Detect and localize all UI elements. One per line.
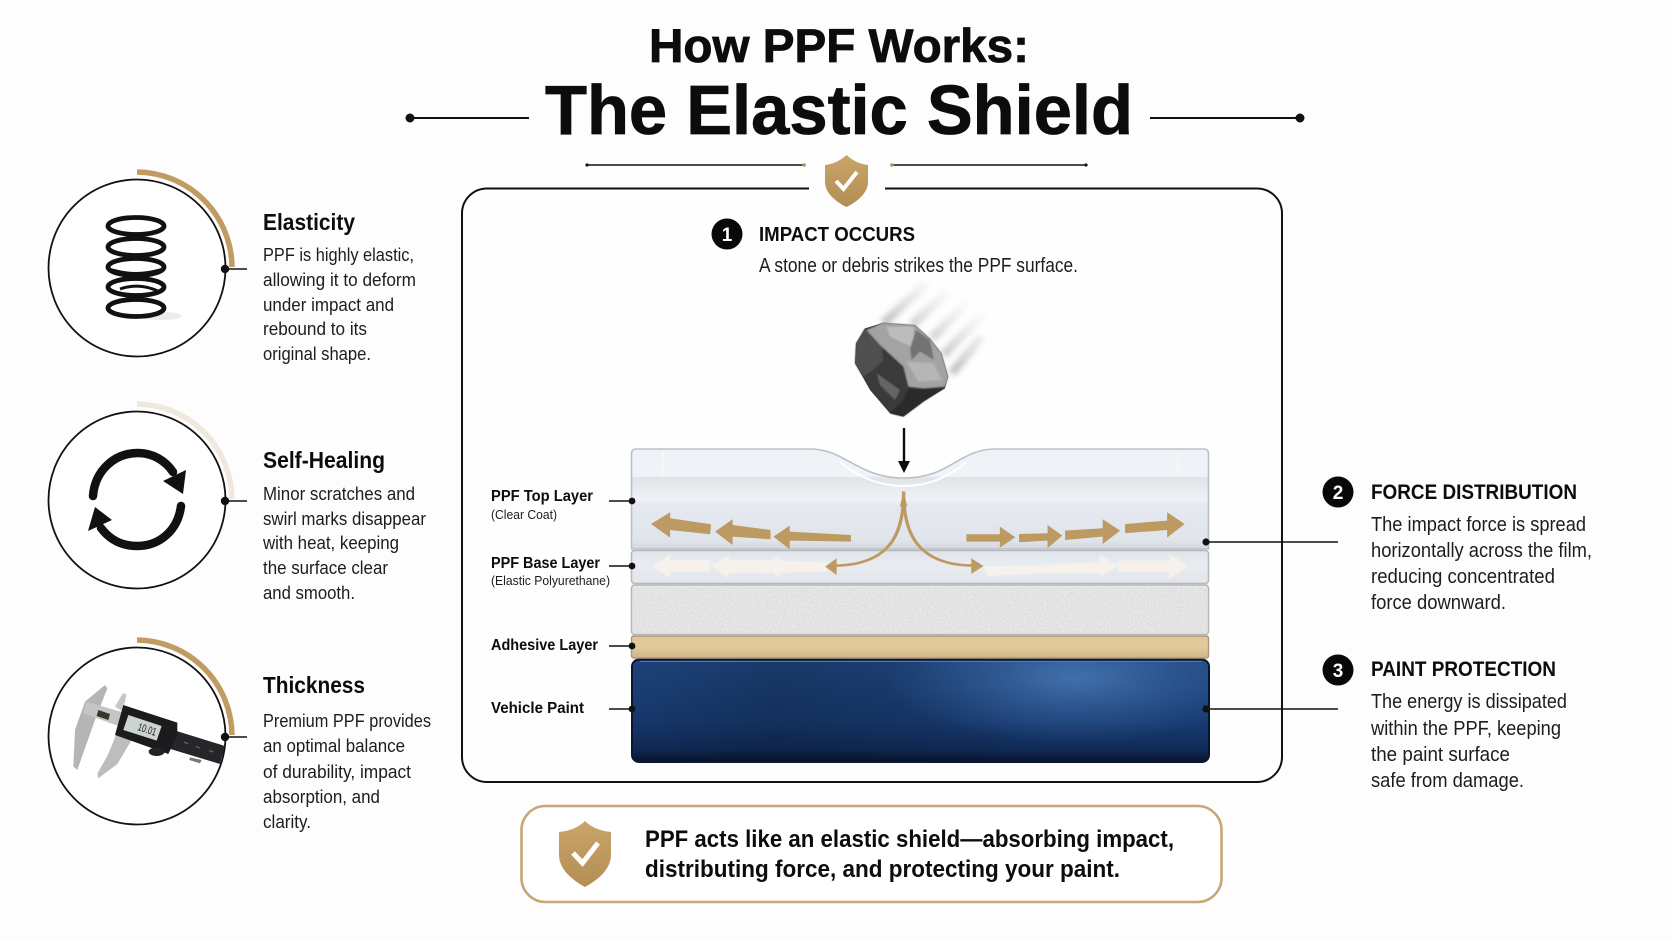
icon: callout shield (559, 821, 611, 887)
gold arrows left (651, 512, 851, 549)
right leader lines (1202, 538, 1338, 713)
divider rules beside shield (585, 163, 1088, 167)
self-healing text: swirl marks disappear (263, 509, 426, 529)
layer stack (632, 449, 1209, 762)
thickness text: an optimal balance (263, 736, 405, 756)
gold arrows right (966, 512, 1185, 548)
elasticity text: PPF is highly elastic, (263, 245, 414, 265)
label: PPF base layer (491, 555, 610, 588)
step 3 text: the paint surface (1371, 744, 1510, 766)
title line 2: The Elastic Shield (545, 71, 1133, 149)
label: PPF top layer: (Clear Coat) (491, 508, 557, 522)
circle badge with cycle arrows (48, 404, 247, 588)
callout box (522, 806, 1222, 902)
self-healing text: with heat, keeping (262, 533, 399, 553)
label: vehicle paint: Vehicle Paint (491, 700, 585, 717)
icon: gold shield (825, 155, 868, 207)
title line 1: How PPF Works: (649, 19, 1029, 72)
elasticity text: allowing it to deform (263, 270, 416, 290)
panel: layer diagram frame (462, 188, 1282, 782)
elasticity text: rebound to its (263, 319, 367, 339)
thickness text: Premium PPF provides (263, 711, 431, 731)
thickness heading: Thickness (263, 672, 365, 698)
thickness text: absorption, and (263, 787, 380, 807)
feature: thickness (48, 640, 431, 832)
feature: self-healing (48, 404, 426, 603)
step 2 text (1371, 514, 1592, 614)
layer labels (491, 488, 610, 717)
self-healing text: the surface clear (263, 558, 388, 578)
label: PPF base layer: PPF Base Layer (491, 555, 600, 572)
icon: digital caliper (73, 685, 225, 778)
motion streaks (883, 283, 985, 373)
inner edge highlights (663, 452, 1178, 486)
icon: spring (108, 218, 182, 320)
step 1 badge: 1 (722, 225, 733, 246)
force arrows (651, 491, 1188, 579)
callout text: distributing force, and protecting your paint. (645, 856, 1120, 883)
step 2 text: reducing concentrated (1371, 566, 1555, 588)
feature: elasticity (48, 172, 416, 364)
thickness text: of durability, impact (263, 762, 411, 782)
caliper readout: 10.01 (136, 721, 158, 739)
layer: vehicle paint (632, 660, 1209, 762)
step 2 text: horizontally across the film, (1371, 540, 1592, 562)
elasticity text: under impact and (263, 295, 394, 315)
step 2: force distribution (1322, 476, 1592, 614)
stone (855, 323, 948, 417)
title left rule with dot (406, 114, 529, 122)
icon: cycle arrows (88, 453, 186, 546)
title right rule with dot (1150, 114, 1304, 122)
step 2 badge: 2 (1333, 483, 1343, 504)
step 2 badge (1322, 476, 1354, 508)
self-healing heading: Self-Healing (263, 447, 385, 473)
label: adhesive layer: Adhesive Layer (491, 637, 598, 654)
stone with motion streaks (855, 283, 985, 417)
callout text: PPF acts like an elastic shield—absorbing impact, (645, 826, 1174, 853)
step 3 text: safe from damage. (1371, 770, 1524, 792)
elasticity text (263, 245, 416, 364)
label: PPF top layer: PPF Top Layer (491, 488, 593, 505)
title (545, 19, 1133, 149)
left leader lines (609, 498, 635, 712)
step 3 text (1370, 691, 1567, 792)
circle badge with spring (48, 172, 247, 356)
step 1 badge (712, 218, 742, 250)
step 3 heading: PAINT PROTECTION (1371, 658, 1556, 681)
step 1 text: A stone or debris strikes the PPF surface. (759, 255, 1078, 277)
step 1: impact occurs (712, 218, 1078, 277)
step 2 text: force downward. (1371, 592, 1506, 614)
impact arrow (898, 428, 910, 473)
step 1 heading: IMPACT OCCURS (759, 224, 915, 246)
elasticity heading: Elasticity (263, 209, 355, 235)
step 3 text: within the PPF, keeping (1370, 718, 1561, 740)
label: PPF base layer: (Elastic Polyurethane) (491, 574, 610, 588)
layer: PPF top with dent (632, 449, 1208, 549)
self-healing text: Minor scratches and (263, 484, 415, 504)
label: PPF top layer (491, 488, 593, 522)
step 3 badge: 3 (1333, 661, 1343, 682)
thickness text (263, 711, 431, 832)
thickness text: clarity. (263, 812, 311, 832)
callout: summary (522, 806, 1222, 902)
layer: foam texture (632, 585, 1208, 634)
self-healing text: and smooth. (263, 583, 355, 603)
step 3 badge (1322, 654, 1354, 686)
layer: PPF base (632, 550, 1208, 584)
step 3 text: The energy is dissipated (1371, 691, 1567, 713)
step 3: paint protection (1322, 654, 1567, 792)
branching force curves (825, 491, 984, 575)
layer: adhesive (632, 636, 1208, 658)
circle badge with caliper (48, 640, 247, 824)
self-healing text (262, 484, 426, 603)
callout text (645, 826, 1174, 883)
step 2 text: The impact force is spread (1371, 514, 1586, 536)
pale arrows in base layer (653, 553, 1188, 579)
elasticity text: original shape. (263, 344, 371, 364)
step 2 heading: FORCE DISTRIBUTION (1371, 481, 1577, 504)
